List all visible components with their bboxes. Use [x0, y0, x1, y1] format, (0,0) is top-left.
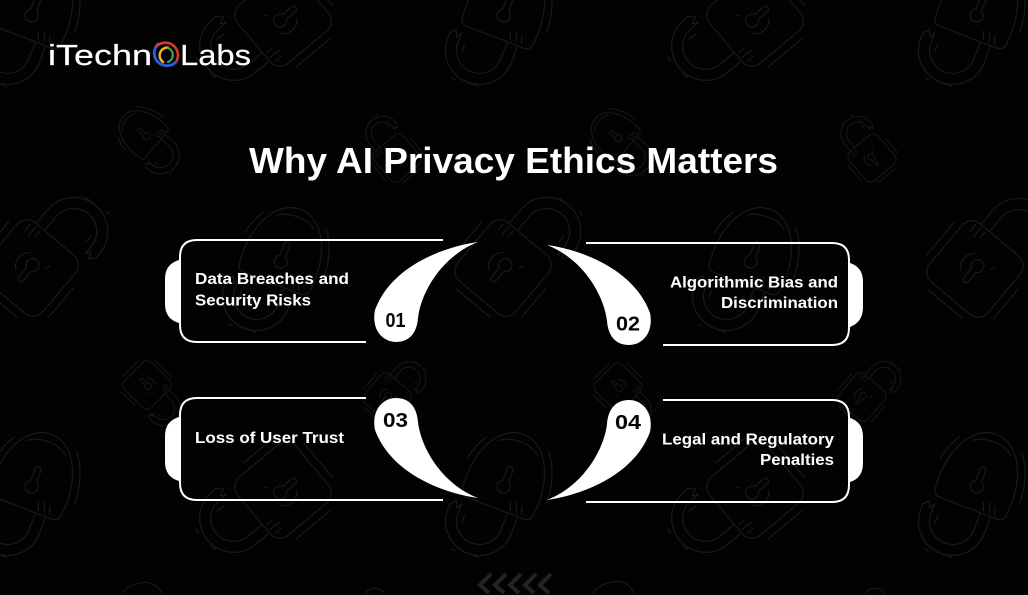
text 02: Discrimination [721, 295, 838, 312]
text 01: Security Risks [195, 292, 311, 310]
card outline 04 [586, 400, 849, 502]
text 04: Penalties [760, 452, 834, 469]
logo: iTechnoLabs [48, 40, 251, 72]
text 01: Data Breaches and [195, 271, 349, 288]
tab 02 [850, 263, 863, 327]
number 04: 04 [615, 412, 642, 434]
number 02: 02 [616, 314, 640, 336]
teardrop 03 [374, 398, 478, 498]
card outline 02 [586, 243, 849, 345]
panel: 04 Legal and Regulatory Penalties [547, 400, 863, 502]
number 01: 01 [386, 310, 406, 332]
icon: bottom chevrons [480, 574, 551, 593]
teardrop 04 [547, 400, 651, 500]
teardrop 01 [374, 242, 478, 342]
tab 01 [165, 260, 179, 323]
card outline 03 [180, 398, 443, 500]
title: Why AI Privacy Ethics Matters [249, 140, 778, 181]
card outline 01 [180, 240, 443, 342]
panel: 01 Data Breaches and Security Risks [165, 240, 478, 342]
panel: 02 Algorithmic Bias and Discrimination [547, 243, 863, 345]
text 03: Loss of User Trust [195, 430, 345, 447]
text 02: Algorithmic Bias and [670, 274, 838, 292]
teardrop 02 [547, 245, 651, 345]
text 04: Legal and Regulatory [662, 432, 834, 448]
logo: iTechnoLabs: Labs [180, 40, 251, 72]
tab 04 [850, 418, 863, 482]
number 03: 03 [383, 410, 408, 432]
icon: logo ring [154, 43, 178, 66]
tab 03 [165, 417, 179, 481]
panel: 03 Loss of User Trust [165, 398, 478, 500]
logo: iTechnoLabs: iTechn [48, 40, 152, 72]
